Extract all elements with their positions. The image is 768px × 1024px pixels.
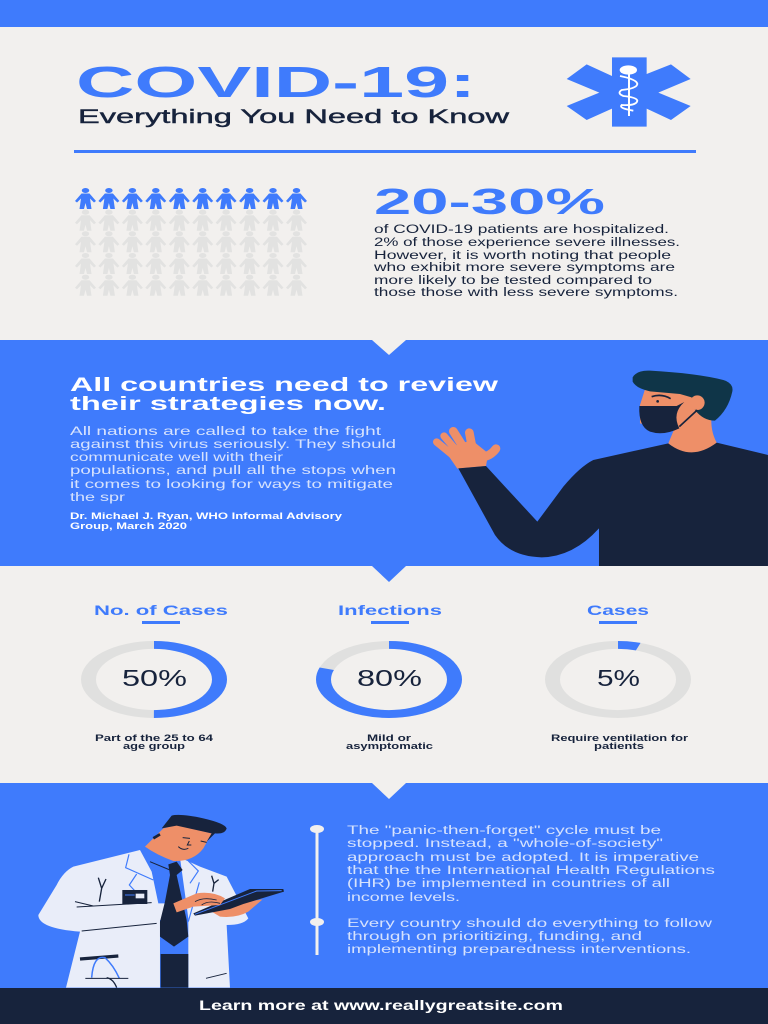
quote attribution: Dr. Michael J. Ryan, WHO Informal Advisory [70,511,343,522]
stat: Cases [551,603,688,752]
recommendation text: second point: implementing preparedness interventions. [347,942,691,956]
strategies body text: communicate well with their [70,450,283,464]
recommendation text: first point: that the the International Health Regulations [347,863,715,877]
big statistic: 20-30% [374,181,605,222]
pictogram: 10 of 50 people in blue [75,188,307,296]
strategies body text [70,424,396,504]
stat: Cases: patients [594,741,644,752]
illustration: doctor with tablet [38,815,284,988]
strategies heading: All countries need to review [70,375,498,396]
recommendation text: first point: approach must be adopted. It is imperative [347,850,699,864]
recommendation text: first point: stopped. Instead, a "whole-of-society" [347,836,663,850]
title [76,58,511,128]
panel: strategies [0,340,768,582]
recommendation text: second point: through on prioritizing, funding, and [347,929,642,943]
recommendation text: first point: income levels. [347,890,460,904]
panel: recommendations [0,783,768,988]
footer: Learn more at www.reallygreatsite.com [199,998,563,1013]
stat: Cases: 5% [597,665,640,691]
stat: No. of Cases [88,603,228,752]
strategies body text: it comes to looking for ways to mitigate [70,477,393,491]
recommendation text: first point: (IHR) be implemented in countries of all [347,876,670,890]
divider rule [74,150,696,153]
strategies body text: the spr [70,490,125,504]
stat: No. of Cases: age group [123,741,185,752]
quote attribution: Group, March 2020 [70,521,187,532]
icon: star of life with staff [567,57,691,127]
statistic description: of COVID-19 patients are hospitalized. [374,222,669,236]
stat: Infections: 80% [357,665,422,691]
stat: No. of Cases: Part of the 25 to 64 [95,733,214,744]
title: Everything You Need to Know [78,106,511,128]
statistic description: more likely to be tested compared to [374,273,652,287]
timeline [310,825,324,955]
strategies body text: populations, and pull all the stops when [70,463,396,477]
stat: Infections [324,603,454,752]
statistic description: However, it is worth noting that people [374,248,671,262]
stat: Cases: Cases [587,603,649,618]
recommendation text: first point [347,823,715,904]
top bar [0,0,768,27]
stat: Infections: asymptomatic [346,741,433,752]
statistic description [373,222,680,299]
quote attribution [70,511,343,532]
recommendation text: first point: The "panic-then-forget" cycle must be [347,823,661,837]
footer [0,988,768,1024]
stat: Cases: Require ventilation for [551,733,688,744]
stat: No. of Cases: 50% [122,665,187,691]
statistic description: 2% of those experience severe illnesses. [374,235,680,249]
statistic description: who exhibit more severe symptoms are [373,260,675,274]
strategies body text: against this virus seriously. They should [70,437,396,451]
recommendation text: second point: Every country should do everything to follow [347,916,712,930]
recommendation text: second point [347,916,712,956]
title: COVID-19: [76,58,476,107]
stat: Infections: Infections [338,603,442,618]
illustration: masked man waving [437,371,768,566]
strategies body text: All nations are called to take the fight [70,424,382,438]
stat: Infections: Mild or [367,733,411,744]
statistic description: those those with less severe symptoms. [374,285,678,299]
strategies heading: their strategies now. [70,394,386,415]
stat: No. of Cases: No. of Cases [94,603,228,618]
strategies heading [70,375,498,415]
